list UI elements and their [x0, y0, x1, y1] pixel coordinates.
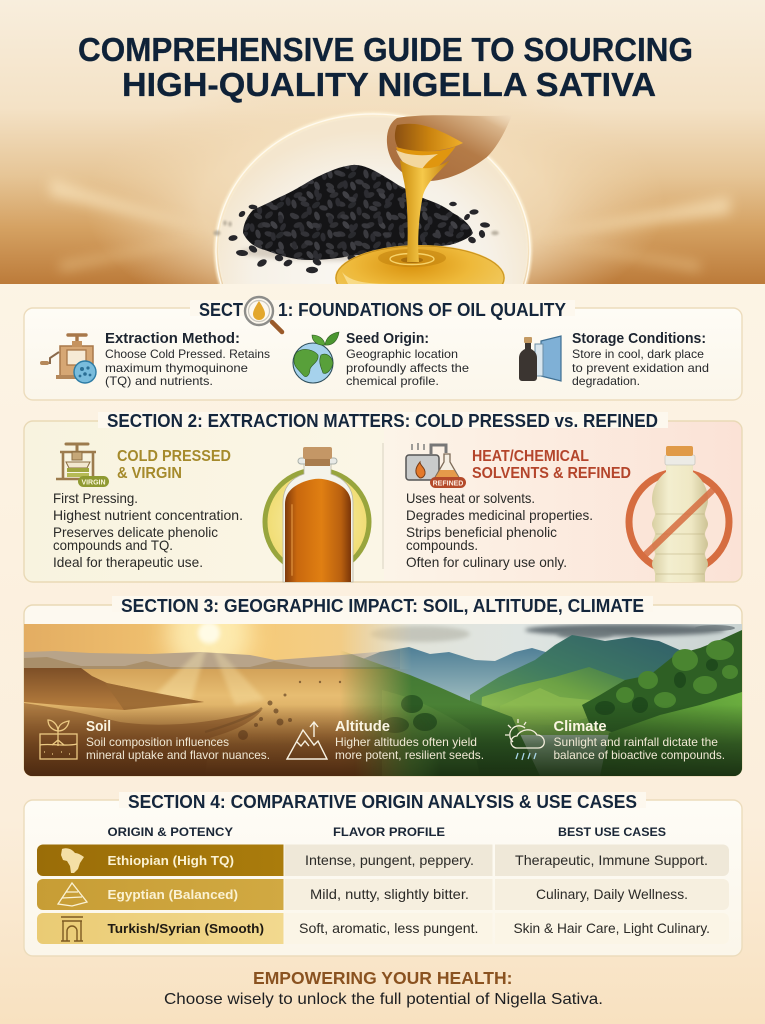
text: extraction method: maximum thymoquinone: [105, 361, 248, 375]
text: climate: balance of bioactive compounds.: [554, 748, 725, 762]
right side green mountain scene: [300, 624, 742, 776]
list: cold pressed benefits: Highest nutrient concentration.: [53, 508, 243, 523]
heading: section 1: SECT: [199, 299, 244, 320]
heading: cold pressed and virgin: [117, 448, 231, 482]
text: seed origin: Geographic location: [346, 347, 458, 361]
list: cold pressed benefits: compounds and TQ.: [53, 538, 173, 553]
table row: Ethiopian: Intense, pungent, peppery.: [305, 853, 474, 868]
text: soil: [86, 718, 270, 762]
text: storage conditions: Store in cool, dark place: [572, 347, 704, 361]
text: altitude: more potent, resilient seeds.: [335, 748, 484, 762]
panel: section 3 geographic impact: [24, 591, 742, 776]
icon: Africa: [61, 848, 84, 873]
panel: section 4 comparative analysis: [24, 791, 742, 956]
hero banner: [0, 0, 765, 284]
list: refined drawbacks: Degrades medicinal properties.: [406, 508, 593, 523]
text: soil: mineral uptake and flavor nuances.: [86, 748, 270, 762]
text: altitude: Higher altitudes often yield: [335, 735, 477, 749]
icon: arch: [61, 917, 83, 941]
heading: heat chemical solvents and refined: SOLVENTS & REFINED: [472, 465, 631, 482]
list: cold pressed benefits: First Pressing.: [53, 491, 138, 506]
table row: Turkish/Syrian: Soft, aromatic, less pungent.: [299, 921, 478, 936]
heading: section 1: 1: FOUNDATIONS OF OIL QUALITY: [278, 299, 567, 320]
icon: virgin press: VIRGIN: [81, 480, 106, 486]
table row: Ethiopian: Therapeutic, Immune Support.: [515, 853, 708, 868]
table column headers: BEST USE CASES: [558, 825, 666, 839]
text: extraction method: (TQ) and nutrients.: [105, 374, 213, 388]
icon: refined bottle with prohibition sign: [629, 446, 729, 582]
list: refined drawbacks: compounds.: [406, 538, 478, 553]
text: seed origin: profoundly affects the: [346, 361, 469, 375]
title: COMPREHENSIVE GUIDE TO SOURCING: [78, 31, 693, 68]
list: cold pressed benefits: Preserves delicate phenolic: [53, 525, 218, 540]
icon: magnifier with oil drop: [245, 297, 282, 332]
list: refined drawbacks: Strips beneficial phenolic: [406, 525, 557, 540]
icon: globe with leaves: [293, 332, 339, 383]
seed pile: [214, 165, 499, 273]
oil pool: [335, 245, 505, 284]
icon: dark bottle and door: [519, 336, 561, 381]
text: extraction method: Choose Cold Pressed. Retains: [105, 347, 270, 361]
text: altitude: [335, 718, 484, 762]
icon: altitude mountain: [287, 722, 327, 759]
title: HIGH-QUALITY NIGELLA SATIVA: [122, 66, 656, 103]
footer message: EMPOWERING YOUR HEALTH:: [253, 968, 512, 988]
heading: cold pressed and virgin: COLD PRESSED: [117, 448, 231, 465]
icon: refinery apparatus: [406, 443, 466, 488]
icon: climate sun cloud rain: [505, 719, 544, 760]
text: seed origin: Seed Origin:: [346, 331, 429, 347]
heading: cold pressed and virgin: & VIRGIN: [117, 465, 182, 482]
table column headers: ORIGIN & POTENCY: [108, 825, 233, 839]
icon: soil sprout: [40, 720, 77, 759]
table column headers: [108, 825, 666, 839]
heading: section 3: SECTION 3: GEOGRAPHIC IMPACT: SOIL, ALTITUDE, CLIMATE: [121, 595, 644, 616]
list: refined drawbacks: Often for culinary use only.: [406, 555, 567, 570]
panel: section 2 extraction matters: [24, 410, 742, 582]
text: soil: Soil: [86, 718, 111, 735]
table row: Egyptian: Culinary, Daily Wellness.: [536, 887, 688, 902]
icon: virgin press: [56, 444, 109, 487]
table row: Turkish/Syrian: Turkish/Syrian (Smooth): [108, 921, 264, 936]
text: storage conditions: to prevent exidation and: [572, 361, 709, 375]
heading: heat chemical solvents and refined: HEAT/CHEMICAL: [472, 448, 589, 465]
icon: pyramid: [58, 883, 87, 906]
text: climate: Climate: [554, 718, 606, 735]
footer message: Choose wisely to unlock the full potential of Nigella Sativa.: [164, 991, 603, 1008]
text: altitude: Altitude: [335, 718, 390, 735]
table column headers: FLAVOR PROFILE: [333, 825, 445, 839]
text: climate: Sunlight and rainfall dictate the: [554, 735, 718, 749]
icon: amber oil bottle in ring: [265, 447, 369, 582]
heading: section 4: SECTION 4: COMPARATIVE ORIGIN ANALYSIS & USE CASES: [128, 791, 637, 812]
text: storage conditions: degradation.: [572, 374, 640, 388]
list: refined drawbacks: [406, 491, 593, 570]
text: seed origin: chemical profile.: [346, 374, 439, 388]
table row: Turkish/Syrian: Skin & Hair Care, Light Culinary.: [514, 921, 710, 936]
table row: Ethiopian: Ethiopian (High TQ): [108, 853, 234, 868]
list: refined drawbacks: Uses heat or solvents.: [406, 491, 535, 506]
heading: section 2: SECTION 2: EXTRACTION MATTERS: COLD PRESSED vs. REFINED: [107, 410, 658, 431]
glowing halo ring: [213, 112, 533, 284]
text: soil: Soil composition influences: [86, 735, 229, 749]
list: cold pressed benefits: Ideal for therapeutic use.: [53, 555, 203, 570]
text: seed origin: [346, 331, 469, 388]
forest on right: [582, 630, 742, 776]
title: [78, 31, 693, 103]
landscape image: [24, 624, 742, 776]
text: climate: [554, 718, 725, 762]
oil stream: [400, 160, 450, 262]
list: cold pressed benefits: [53, 491, 243, 570]
heading: heat chemical solvents and refined: [472, 448, 631, 482]
text: storage conditions: Storage Conditions:: [572, 331, 706, 347]
wooden spoon pouring oil: [387, 115, 512, 181]
table row: Egyptian: [37, 879, 729, 910]
table row: Ethiopian: [37, 844, 729, 876]
table row: Egyptian: Mild, nutty, slightly bitter.: [310, 887, 469, 902]
panel: section 1 foundations: [24, 297, 742, 400]
icon: refinery apparatus: REFINED: [433, 480, 463, 488]
table row: Egyptian: Egyptian (Balanced): [108, 887, 238, 902]
text: extraction method: [105, 331, 270, 388]
text: storage conditions: [572, 331, 709, 388]
footer message: [164, 968, 603, 1008]
text: extraction method: Extraction Method:: [105, 331, 240, 347]
table row: Turkish/Syrian: [37, 913, 729, 944]
icon: oil press: [40, 335, 96, 383]
